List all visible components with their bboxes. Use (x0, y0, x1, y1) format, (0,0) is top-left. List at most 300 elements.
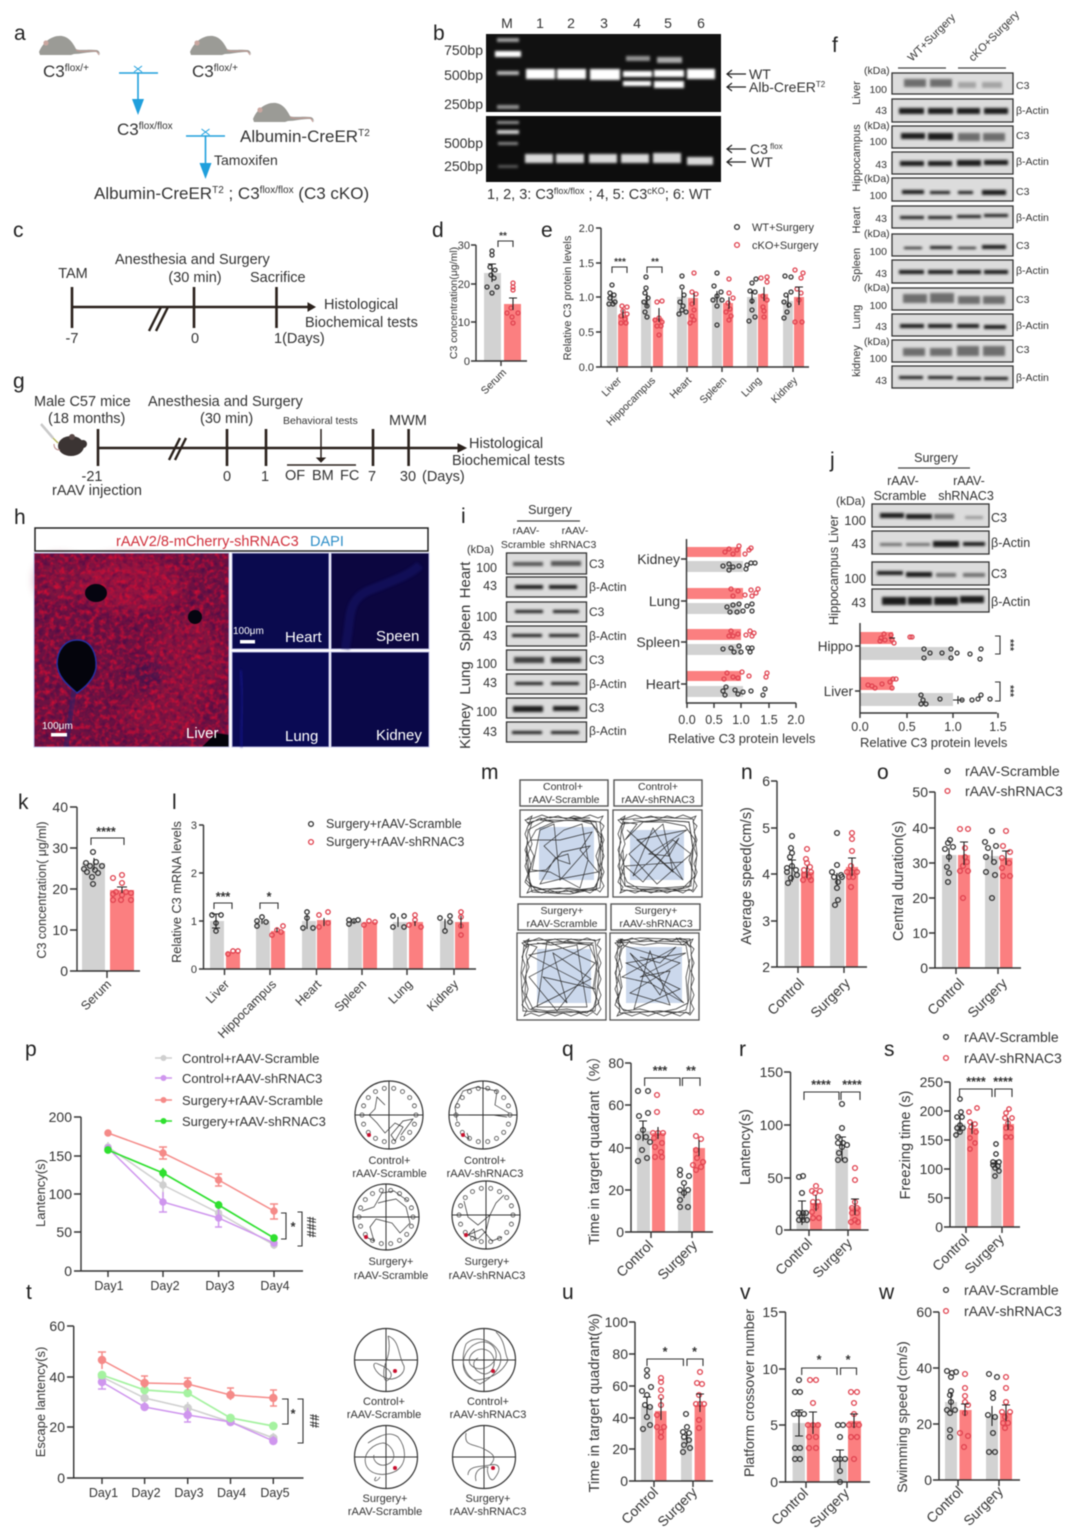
kDa and markers: 100 (869, 300, 887, 312)
y categories (636, 551, 680, 692)
x ticks: 1.5 (989, 720, 1007, 734)
Albumin text: T2 (358, 128, 370, 139)
x labels (929, 1231, 1007, 1277)
protein labels: C3 (589, 653, 605, 667)
dots red (505, 281, 520, 325)
kDa and markers: 43 (875, 105, 887, 117)
group header (898, 8, 1022, 68)
lane labels: 2 (567, 15, 575, 31)
heading g: g (13, 370, 25, 393)
bp labels: 250bp (444, 158, 483, 174)
protein labels: β-Actin (589, 580, 627, 594)
x ticks (678, 713, 805, 727)
significance: **** (811, 1078, 831, 1092)
ticks: 10 (52, 922, 68, 938)
series: red (98, 1352, 277, 1406)
bars (210, 921, 454, 969)
maze captions: Control+ (369, 1155, 410, 1167)
heading c: c (13, 219, 24, 242)
bp labels: 500bp (444, 135, 483, 151)
ticks (920, 1074, 943, 1235)
band arrows and labels: flox (768, 142, 783, 151)
day labels: Day4 (217, 1486, 246, 1500)
axis (784, 1072, 869, 1236)
maze 3 (354, 1426, 418, 1488)
dots red (958, 827, 1012, 900)
ticks: 0 (64, 1263, 72, 1279)
legend: rAAV-Scramble (964, 1282, 1059, 1298)
protein labels: C3 (1016, 344, 1030, 356)
marker labels: 100 (476, 705, 497, 719)
day labels: Day4 (260, 1279, 290, 1293)
dots black (797, 1102, 849, 1222)
dots red (810, 1166, 860, 1224)
blot frames (892, 73, 1013, 388)
kDa: (kDa) (467, 544, 494, 556)
legend: cKO+Surgery (752, 240, 819, 252)
organ labels: Lung (457, 661, 474, 695)
ticks (912, 784, 928, 976)
timeline labels: Histological (469, 436, 543, 452)
tick labels (579, 223, 594, 374)
protein labels: C3 (1016, 80, 1030, 92)
significance: *** (1004, 639, 1015, 651)
significance: ### (304, 1217, 318, 1237)
legend (944, 1029, 1062, 1066)
timeline labels: TAM (58, 266, 88, 282)
axis (625, 1063, 713, 1238)
x ticks: 1.0 (944, 720, 962, 734)
panel p: latency line chart (25, 1038, 326, 1293)
ticks (608, 1055, 624, 1240)
ticks: 20 (612, 1441, 628, 1457)
lane labels: 6 (697, 15, 705, 31)
protein labels: β-Actin (1016, 320, 1049, 332)
y label: Average speed(cm/s) (739, 807, 755, 945)
heading b: b (433, 22, 445, 45)
header text: Control+ (543, 781, 583, 793)
series: green (105, 1147, 277, 1241)
panel v: platform crossover number (740, 1281, 870, 1531)
icon: mouse 2 (190, 36, 251, 55)
kDa and markers: 43 (875, 268, 887, 280)
significance: * (846, 1353, 851, 1367)
y label: Time in targert quadrant（%） (586, 1049, 603, 1245)
group header (874, 451, 994, 503)
group header: Surgery (914, 451, 959, 465)
error bars (889, 638, 963, 704)
ticks: 40 (912, 820, 928, 836)
day labels: Day5 (260, 1486, 290, 1500)
horizontal bars (687, 547, 743, 697)
panel e: protein levels across organs (541, 219, 819, 429)
ticks: 2 (191, 868, 197, 880)
organ labels: Lung (851, 305, 863, 329)
timeline labels: Anesthesia and Surgery (115, 252, 271, 268)
x labels: Control (618, 1484, 661, 1527)
error bars (951, 1392, 1010, 1426)
maze captions: Surgery+ (369, 1256, 413, 1268)
heading p: p (25, 1038, 37, 1061)
group header: rAAV- (513, 525, 540, 537)
significance: ** (686, 1064, 696, 1078)
legend (309, 817, 464, 849)
scale bars and organ labels: Liver (186, 725, 219, 742)
x labels: Surgery (960, 1483, 1006, 1529)
ticks: 40 (916, 1360, 932, 1376)
maze 2 (449, 1081, 517, 1149)
marker labels: 43 (852, 536, 866, 551)
ticks: 40 (608, 1140, 624, 1156)
significance: **** (842, 1078, 862, 1092)
protein labels: β-Actin (589, 677, 627, 691)
legend (944, 1282, 1062, 1319)
significance: * (692, 1345, 697, 1359)
ticks: 60 (49, 1318, 65, 1334)
x labels: Kidney (424, 977, 462, 1014)
x labels (600, 374, 801, 429)
day labels: Day1 (94, 1279, 124, 1293)
protein labels (991, 511, 1030, 609)
header text: Surgery+ (541, 905, 583, 917)
y label: Escape lantency(s) (33, 1347, 48, 1457)
blot frames (872, 504, 989, 612)
panel m: open field tracks (481, 761, 702, 1020)
x labels: Control (772, 1235, 815, 1278)
panel o: central duration (877, 761, 1063, 1021)
offspring text: C3 (117, 120, 139, 139)
bp labels: 750bp (444, 42, 483, 58)
ticks: 100 (920, 1161, 943, 1177)
timeline labels: FC (340, 468, 359, 484)
gel caption: flox/flox (554, 186, 585, 196)
ticks: 6 (762, 773, 770, 789)
cross arrow 1 (119, 66, 158, 115)
ticks (762, 1304, 778, 1490)
panel u: time in target quadrant (562, 1281, 713, 1530)
protein labels (1016, 80, 1049, 384)
panel g: rAAV timeline (13, 370, 565, 499)
kDa and markers: 43 (875, 159, 887, 171)
ticks: 40 (49, 1369, 65, 1385)
x ticks (851, 720, 1007, 734)
x labels: Lung (739, 375, 764, 400)
ticks: 50 (912, 784, 928, 800)
icon: black mouse with syringe (41, 424, 87, 456)
timeline labels: 1 (261, 469, 269, 485)
marker labels (476, 561, 497, 739)
water maze probes t (347, 1328, 526, 1518)
dots red (655, 1370, 706, 1439)
title box: rAAV2/8-mCherry-shRNAC3 (116, 534, 299, 550)
kDa and markers: (kDa) (864, 173, 890, 185)
timeline labels: BM (312, 468, 334, 484)
x labels: Spleen (332, 977, 369, 1015)
timeline labels: 0 (223, 469, 231, 485)
axis (933, 1312, 1020, 1486)
timeline labels: Biochemical tests (452, 453, 565, 469)
maze captions: Surgery+ (465, 1256, 509, 1268)
ticks: 50 (927, 1190, 943, 1206)
dots red (958, 1372, 1012, 1449)
y label: Platform crossover number (741, 1309, 757, 1477)
protein labels: β-Actin (1016, 105, 1049, 117)
marker labels: 43 (483, 676, 497, 690)
axis (629, 1322, 713, 1487)
protein labels: β-Actin (991, 595, 1030, 609)
ticks: 0 (60, 963, 68, 979)
band arrows and labels (727, 66, 826, 170)
panel f: western blots across organs (832, 8, 1049, 388)
significance (960, 1075, 1013, 1097)
ticks (762, 773, 770, 975)
header text: Surgery+ (635, 905, 677, 917)
x labels (772, 1235, 855, 1281)
timeline labels: Biochemical tests (305, 315, 418, 331)
timeline labels: (30 min) (200, 411, 253, 427)
ticks: 10 (762, 1361, 778, 1377)
bars red (618, 294, 804, 367)
timeline labels: Anesthesia and Surgery (148, 394, 304, 410)
axis (771, 781, 867, 973)
ticks: 10 (912, 925, 928, 941)
axis (779, 1312, 870, 1488)
kDa and markers: (kDa) (864, 228, 890, 240)
x label: Serum (78, 977, 114, 1013)
bp labels (444, 42, 483, 174)
ticks: 20 (52, 881, 68, 897)
legend: rAAV-Scramble (964, 1029, 1059, 1045)
marker labels: 43 (483, 629, 497, 643)
group header: shRNAC3 (550, 539, 596, 551)
heading j: j (829, 449, 835, 472)
group header: shRNAC3 (938, 489, 994, 503)
lane labels: 3 (600, 15, 608, 31)
timeline labels: Histological (324, 297, 398, 313)
y label: Time in targert quadrant(%) (587, 1313, 603, 1493)
heading s: s (884, 1038, 894, 1061)
protein labels: C3 (1016, 186, 1030, 198)
organ labels: Hippocampus (851, 124, 863, 192)
marker labels: 100 (476, 561, 497, 575)
ticks: 100 (605, 1314, 628, 1330)
significance (995, 636, 1015, 701)
kDa and markers: 43 (875, 321, 887, 333)
kDa and markers: 100 (869, 136, 887, 148)
dots black (210, 910, 452, 933)
significance (281, 1212, 318, 1246)
x labels: Liver (600, 374, 624, 399)
bp labels: 500bp (444, 67, 483, 83)
ticks: 0 (770, 1474, 778, 1490)
maze captions: Surgery+ (466, 1493, 510, 1505)
y categories (818, 639, 853, 699)
panel d: serum C3 (432, 219, 527, 397)
heading u: u (562, 1281, 574, 1304)
x labels: Kidney (769, 374, 801, 406)
ticks: 0 (920, 960, 928, 976)
maze captions: Control+ (363, 1396, 405, 1408)
protein labels: C3 (1016, 130, 1030, 142)
ticks: 20 (916, 1416, 932, 1432)
panel n: average speed (739, 761, 867, 1021)
scale bars and organ labels: 100μm (233, 626, 264, 637)
heading m: m (481, 761, 498, 784)
ticks: 4 (762, 866, 770, 882)
panel a: breeding scheme (14, 22, 370, 203)
ticks (605, 1314, 628, 1489)
ticks (49, 1109, 72, 1279)
legend: rAAV-Scramble (965, 763, 1060, 779)
timeline labels: OF (285, 468, 305, 484)
tick labels: 0 (464, 356, 470, 368)
protein labels: β-Actin (1016, 156, 1049, 168)
legend: rAAV-shRNAC3 (964, 1303, 1062, 1319)
significance: * (267, 890, 272, 904)
significance (647, 1345, 703, 1366)
significance (804, 1078, 862, 1100)
ticks: 80 (608, 1055, 624, 1071)
timeline labels: (Days) (422, 469, 465, 485)
timeline axis (72, 287, 315, 331)
maze 1 (355, 1081, 423, 1149)
kDa and markers: (kDa) (864, 336, 890, 348)
x labels: Surgery (654, 1237, 700, 1283)
heading o: o (877, 761, 889, 784)
x label: Serum (479, 366, 509, 397)
water maze probes p (352, 1081, 525, 1282)
marker labels: 43 (483, 579, 497, 593)
ticks: 200 (49, 1109, 72, 1125)
ticks: 60 (612, 1378, 628, 1394)
y label: C3 concentration( μg/ml) (35, 821, 49, 959)
offspring text: flox/flox (139, 121, 173, 132)
ticks (52, 799, 68, 979)
ticks: 30 (912, 855, 928, 871)
dots black (954, 1097, 1001, 1178)
result genotype: flox/flox (260, 185, 294, 196)
significance: *** (216, 890, 230, 904)
header boxes (518, 780, 702, 930)
panel k: serum C3 concentration (18, 791, 140, 1013)
y label: Central duration(s) (891, 821, 907, 941)
y label: Swimming speed (cm/s) (895, 1341, 911, 1493)
legend (735, 222, 819, 252)
series: gray (105, 1142, 277, 1249)
y label: Relative C3 mRNA levels (170, 821, 184, 963)
scale bars and organ labels: Lung (285, 728, 318, 745)
heading q: q (562, 1038, 574, 1061)
panel b: genotyping gels (433, 15, 826, 203)
y categories: Lung (649, 593, 680, 609)
band arrows and labels: T2 (816, 80, 826, 89)
heading t: t (26, 1281, 32, 1304)
day labels: Day3 (205, 1279, 235, 1293)
bars (942, 855, 1012, 968)
heading e: e (541, 219, 553, 242)
band arrows and labels: C3 (750, 141, 768, 157)
dots gray groups (607, 271, 793, 327)
error bars (94, 858, 127, 893)
axis (70, 807, 140, 978)
dots red (651, 1093, 705, 1172)
Albumin text: Albumin-CreER (240, 127, 358, 146)
protein labels: C3 (991, 511, 1007, 525)
ticks: 20 (912, 890, 928, 906)
ticks: 20 (49, 1419, 65, 1435)
significance: * (291, 1220, 296, 1234)
timeline labels: -7 (66, 331, 78, 347)
significance: ## (307, 1414, 321, 1428)
x ticks: 1.5 (760, 713, 778, 727)
legend: WT+Surgery (752, 222, 815, 234)
marker labels: 100 (844, 513, 866, 528)
maze captions: Control+ (464, 1155, 506, 1167)
organ labels: Liver (826, 514, 841, 543)
significance (645, 1064, 700, 1086)
maze captions: rAAV-shRNAC3 (450, 1409, 526, 1421)
bars (641, 1405, 705, 1481)
kDa and markers: 100 (869, 246, 887, 258)
icon: mouse 3 (253, 103, 314, 122)
maze 4 (452, 1426, 516, 1488)
lane labels: M (501, 15, 513, 31)
protein labels: C3 (1016, 240, 1030, 252)
group header: rAAV- (953, 474, 985, 488)
dots red groups (619, 268, 805, 337)
tick labels: 0.5 (579, 327, 594, 339)
marker labels: 100 (476, 657, 497, 671)
x labels: Liver (203, 977, 232, 1006)
maze 1 (354, 1328, 418, 1392)
x labels: Control (929, 1231, 972, 1274)
tick labels: 20 (458, 279, 470, 291)
image: speen (331, 553, 429, 649)
icon: mouse 1 (39, 36, 100, 55)
error bars (639, 1121, 699, 1198)
dots red (111, 873, 133, 902)
legend (155, 1051, 326, 1129)
y label: Freezing time (s) (898, 1091, 914, 1199)
dots red (722, 544, 769, 681)
kDa and markers: 100 (869, 353, 887, 365)
axis (855, 623, 998, 718)
axis (199, 825, 476, 975)
significance: * (291, 1407, 296, 1421)
group header (501, 503, 596, 551)
x labels: Control (924, 975, 967, 1018)
legend: rAAV-shRNAC3 (964, 1050, 1062, 1066)
tick labels: 1.5 (579, 258, 594, 270)
significance: **** (96, 825, 116, 839)
heading h: h (14, 506, 26, 529)
significance: *** (1004, 685, 1015, 697)
x ticks: 0.5 (705, 713, 723, 727)
legend: Surgery+rAAV-Scramble (182, 1093, 323, 1108)
protein labels: C3 (991, 567, 1007, 581)
result genotype: (C3 cKO) (294, 184, 369, 203)
series: purple (98, 1375, 277, 1445)
timeline labels: -21 (82, 469, 102, 485)
marker labels: 43 (483, 725, 497, 739)
series: gray (98, 1374, 277, 1444)
x labels: Hippocampus (604, 375, 658, 429)
day labels (89, 1486, 290, 1500)
significance (802, 1353, 856, 1375)
day labels: Day3 (174, 1486, 204, 1500)
scale bars and organ labels: 100μm (42, 721, 73, 732)
dots (485, 249, 499, 295)
